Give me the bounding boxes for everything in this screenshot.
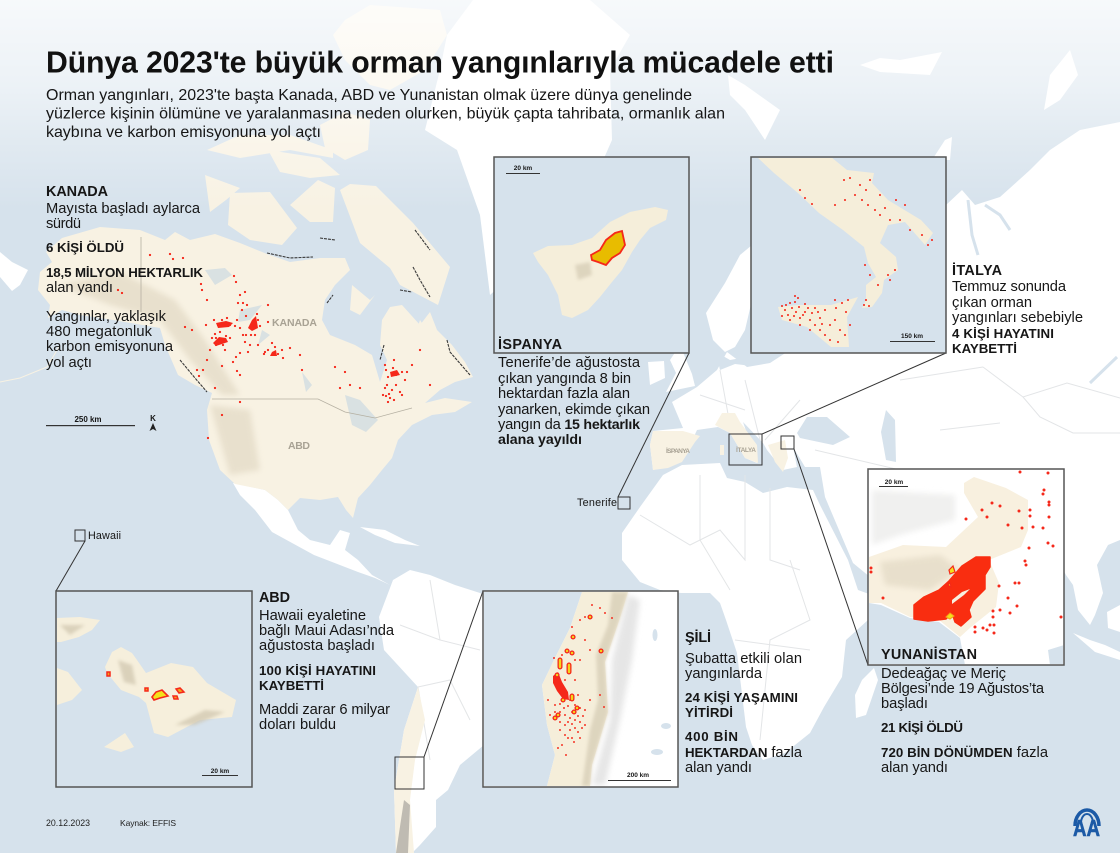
map labels: KANADA (272, 317, 317, 329)
text block: Italya: yangınları sebebiyle (952, 310, 1083, 326)
text block: Kanada: Yangınlar, yaklaşık (46, 309, 167, 325)
borders (400, 367, 1120, 760)
Aleutian islands (0, 345, 60, 382)
map labels: İTALYA (736, 446, 756, 454)
text block: Yunanistan: 21 KİŞİ ÖLDÜ (881, 720, 963, 735)
text block: ABD: 100 KİŞİ HAYATINI (259, 663, 376, 678)
text block: Sili: Şubatta etkili olan (685, 651, 802, 667)
land: North America (38, 227, 473, 518)
scale bar and north arrow: K (150, 414, 156, 423)
text block: Kanada: 18,5 MİLYON HEKTARLIK (46, 265, 203, 280)
text block: Kanada: yol açtı (46, 355, 92, 371)
scale bar and north arrow: 250 km (74, 415, 102, 424)
text block: ABD: bağlı Maui Adası’nda (259, 623, 395, 639)
locator: Tenerife: Tenerife (577, 497, 617, 509)
fire dots (548, 605, 612, 755)
text block: Sili: yangınlarda (685, 666, 763, 682)
text block: Ispanya: çıkan yangında 8 bin (498, 371, 631, 387)
land: Chile (542, 592, 628, 786)
text block: Sili (685, 629, 803, 776)
text block: Ispanya: yanarken, ekimde çıkan (498, 402, 650, 418)
land: Mexico and Central America (233, 483, 420, 585)
text block: Kanada: 6 KİŞİ ÖLDÜ (46, 240, 124, 255)
text block: ABD: Hawaii eyaletine (259, 608, 366, 624)
text block: Italya: KAYBETTİ (952, 341, 1017, 356)
text block: Italya: İTALYA (952, 262, 1003, 279)
land: South America (379, 570, 560, 853)
text block: Kanada: karbon emisyonuna (46, 339, 174, 355)
locator: Hawaii (56, 530, 121, 591)
title: Dünya 2023'te büyük orman yangınlarıyla mücadele etti (46, 46, 834, 80)
text block: Yunanistan: Bölgesi’nde 19 Ağustos’ta (881, 681, 1045, 697)
text block: Italya: Temmuz sonunda (952, 279, 1067, 295)
text block: Sili: ŞİLİ (685, 629, 711, 646)
text block: ABD: ağustosta başladı (259, 638, 375, 654)
scale: 20 km (885, 479, 903, 486)
text block: Sili: YİTİRDİ (685, 705, 733, 720)
lakes (652, 629, 658, 641)
text block: Yunanistan: başladı (881, 696, 928, 712)
locator: Italy (729, 353, 946, 465)
sea (484, 592, 582, 786)
text block: Sili: HEKTARDAN fazla (685, 745, 803, 761)
map labels: ABD (288, 440, 310, 452)
text block: Kanada: Mayısta başladı aylarca (46, 201, 201, 217)
fire dots (782, 178, 932, 342)
text block: Ispanya: yangın da 15 hektarlık (498, 417, 640, 433)
main fire (914, 557, 990, 626)
island: Tenerife (533, 207, 668, 318)
scale bar and north arrow (46, 414, 156, 431)
Canada wildfire markers (118, 254, 430, 438)
panel: Chile map (483, 591, 678, 787)
national borders North America (141, 237, 412, 418)
locator: Chile (395, 591, 483, 789)
text block: Kanada: sürdü (46, 216, 81, 232)
fires (152, 690, 168, 700)
footer: source: Kaynak: EFFIS (120, 818, 176, 828)
main fire (553, 672, 569, 700)
text block: Italya (952, 262, 1083, 356)
text block: Ispanya (498, 355, 650, 448)
land: Greek Thrace (869, 477, 1028, 637)
text block: Ispanya: hektardan fazla alan (498, 386, 630, 402)
text block: Ispanya: Tenerife’de ağustosta (498, 355, 641, 371)
intro text: Orman yangınları, 2023'te başta Kanada, ABD ve Yunanistan olmak üzere dünya genelinde (46, 87, 692, 104)
text block: Kanada: alan yandı (46, 280, 113, 296)
fire area (591, 231, 625, 265)
text block: ABD: doları buldu (259, 717, 336, 733)
sea (869, 603, 1064, 665)
land: Siberia tip (0, 252, 28, 291)
locator: Greece (781, 436, 868, 665)
heading: İSPANYA (498, 336, 563, 353)
text block: Yunanistan: Dedeağaç ve Meriç (881, 666, 1006, 682)
intro text: kaybına ve karbon emisyonuna yol açtı (46, 124, 321, 141)
small fires (946, 613, 954, 619)
land: southern Italy and Sicily (757, 157, 933, 347)
land: Greenland (425, 0, 630, 295)
Argentina terrain (592, 595, 640, 785)
terrain (60, 625, 225, 725)
Bulgaria terrain (872, 490, 955, 545)
land: Madagascar (855, 668, 878, 718)
text block: Sili: alan yandı (685, 760, 752, 776)
text block: Kanada (46, 184, 203, 371)
text block: Yunanistan: alan yandı (881, 760, 948, 776)
land: Spain Italy Greece cream (650, 413, 788, 472)
text block: Italya: çıkan orman (952, 295, 1032, 311)
intro text (46, 87, 725, 141)
text block: Kanada: KANADA (46, 184, 109, 200)
footer: date: 20.12.2023 (46, 818, 90, 828)
heading: YUNANİSTAN (881, 646, 977, 663)
locator: Hawaii: Hawaii (88, 530, 121, 542)
land: Svalbard and Arctic islands (728, 50, 1078, 160)
land: Britain and Ireland (648, 345, 695, 392)
panel: Greece map (868, 469, 1064, 665)
land: Scandinavia (706, 245, 752, 352)
seas (716, 352, 896, 462)
land: Chile strip (394, 687, 425, 853)
text block: Sili: 400 BİN (685, 729, 738, 744)
land: Arctic islands (205, 5, 450, 345)
panel: Italy map (751, 157, 946, 353)
Andes terrain (582, 592, 628, 786)
locator: Tenerife (577, 353, 689, 509)
mountains shading (60, 272, 260, 475)
coast shadows (180, 230, 470, 392)
scale: 150 km (901, 333, 923, 340)
text block: ABD: Maddi zarar 6 milyar (259, 702, 390, 718)
fire clusters: red halo (555, 617, 601, 718)
fire clusters: yellow core (555, 617, 601, 718)
text block: ABD: KAYBETTİ (259, 678, 324, 693)
panel: Maui map (56, 591, 252, 787)
land: Eurasia (650, 122, 1120, 640)
text block: Italya: 4 KİŞİ HAYATINI (952, 326, 1054, 341)
scale: 200 km (627, 772, 649, 779)
top fade (0, 0, 1120, 210)
text block: Yunanistan (881, 666, 1049, 776)
land: Hawaiian islands (57, 617, 236, 752)
map labels (272, 317, 756, 455)
scale: 20 km (514, 165, 532, 172)
map labels: İSPANYA (666, 447, 690, 455)
text block: Yunanistan: 720 BİN DÖNÜMDEN fazla (881, 745, 1049, 761)
terrain (880, 555, 960, 590)
land: Africa (622, 463, 880, 760)
inlets: Ob gulf, Baikal (968, 200, 1117, 383)
text block: Ispanya: alana yayıldı (498, 432, 582, 448)
lakes (205, 268, 378, 432)
text block: Kanada: 480 megatonluk (46, 324, 153, 340)
text block: Sili: 24 KİŞİ YAŞAMINI (685, 690, 798, 705)
land: Indonesia and Borneo (1073, 605, 1120, 660)
text block: ABD (259, 590, 395, 733)
panel: Tenerife map (494, 157, 689, 353)
logo: AA: AA (1073, 815, 1100, 841)
scale: 20 km (211, 768, 229, 775)
intro text: yüzlerce kişinin ölümüne ve yaralanmasına neden olurken, büyük çapta tahribata, ormanlık alan (46, 106, 725, 122)
text block: ABD: ABD (259, 590, 290, 606)
